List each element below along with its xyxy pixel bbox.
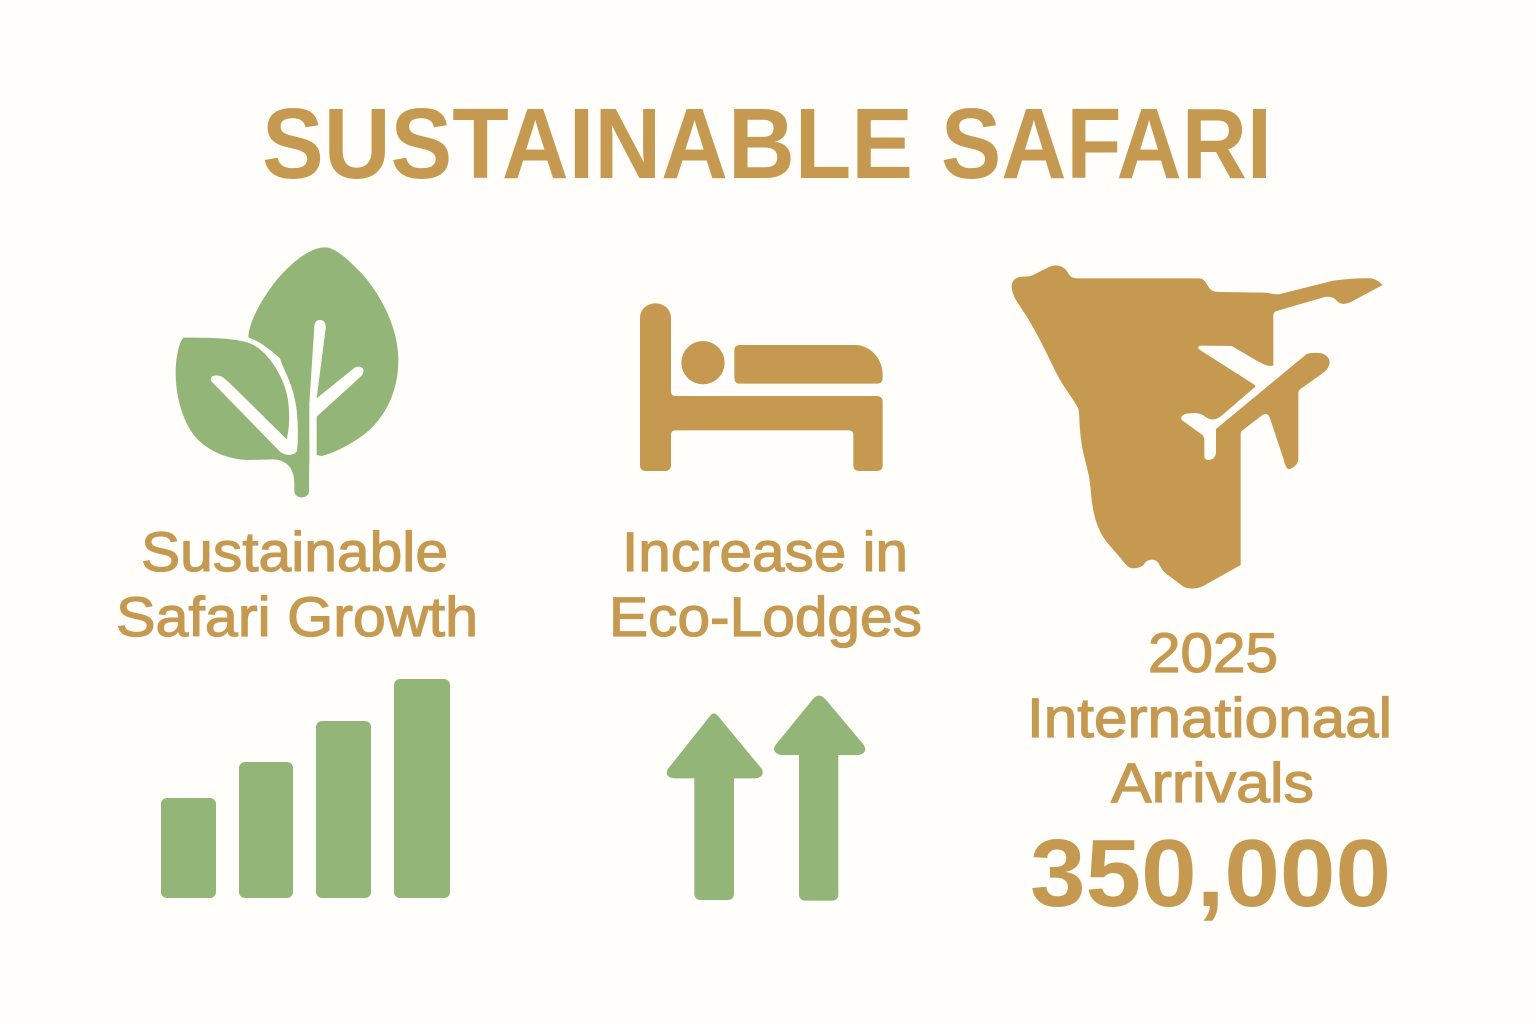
panel: increase in eco-lodges (609, 303, 922, 901)
label: sustainable safari growth: Safari Growth (116, 585, 478, 648)
label: increase in eco-lodges (609, 520, 922, 648)
icon: two up arrows (667, 696, 865, 901)
label: increase in eco-lodges: Eco-Lodges (609, 585, 922, 648)
stat: 350,000: 350,000 (1030, 820, 1391, 927)
icon: leaf sprout (176, 247, 398, 497)
icon: bed (640, 303, 883, 471)
label: 2025 international arrivals (1027, 621, 1392, 814)
panel: sustainable safari growth (116, 247, 478, 898)
label: 2025 international arrivals: Internationaal (1027, 686, 1392, 749)
title: SUSTAINABLE (262, 88, 913, 200)
label: 2025 international arrivals: Arrivals (1111, 751, 1314, 814)
label: increase in eco-lodges: Increase in (622, 520, 908, 583)
icon: namibia map with airplane (1012, 265, 1383, 589)
bar chart: rising growth (161, 679, 450, 898)
title: SAFARI (941, 88, 1272, 200)
label: sustainable safari growth: Sustainable (141, 520, 448, 583)
title (262, 88, 1272, 200)
label: 2025 international arrivals: 2025 (1148, 621, 1278, 684)
panel: international arrivals (1012, 265, 1392, 927)
label: sustainable safari growth (116, 520, 478, 648)
